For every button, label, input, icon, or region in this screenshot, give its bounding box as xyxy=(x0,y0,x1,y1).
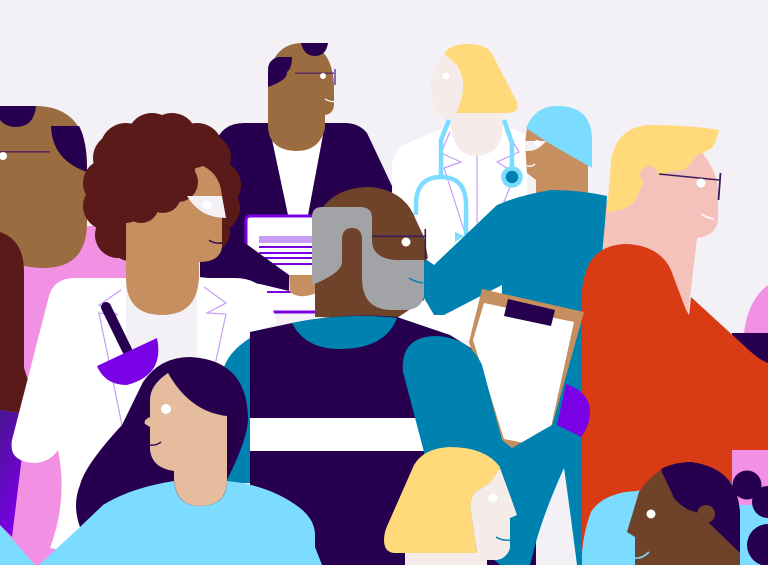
man in suit: hand xyxy=(289,275,316,296)
figure: left edge person in maroon and purple xyxy=(0,232,28,537)
man with grey hair: reflective stripe xyxy=(250,418,426,451)
woman with curly hair: front curls xyxy=(105,135,198,223)
man with grey hair: left teal sleeve xyxy=(223,338,250,483)
man with grey hair: head and neck xyxy=(315,187,428,318)
surgeon: head xyxy=(525,120,588,200)
man in suit: jacket xyxy=(200,123,392,300)
surgeon: smile xyxy=(527,164,535,166)
man in red: face and neck xyxy=(602,150,718,315)
surgeon: teal scrub arm xyxy=(424,190,607,440)
man with grey hair: purple glove xyxy=(557,384,590,437)
doctor: eye xyxy=(442,72,450,80)
surgeon: eye shield xyxy=(525,140,546,151)
man with grey hair: hair and beard xyxy=(312,207,424,310)
blonde woman bottom: eye and smile xyxy=(488,494,510,540)
woman with curly hair: back curls xyxy=(83,113,241,261)
man in suit: head xyxy=(268,43,334,151)
dark sliver xyxy=(530,542,536,565)
woman with curly hair: glasses xyxy=(187,196,226,218)
man in suit: hair xyxy=(268,43,328,87)
doctor: stethoscope xyxy=(416,120,520,242)
man with grey hair: teal collar xyxy=(292,316,397,349)
man in red: ear xyxy=(640,166,658,184)
figure: far left pink body xyxy=(0,226,135,565)
woman bottom right: pink background block xyxy=(732,450,768,510)
woman with curly hair: undershirt xyxy=(126,278,197,380)
tablet xyxy=(246,216,320,312)
man in red: smile xyxy=(701,214,714,219)
man with grey hair: glasses xyxy=(372,229,426,259)
doctor: neck and face xyxy=(430,50,503,156)
man in red: red sweater xyxy=(582,244,768,565)
doctor: white coat xyxy=(392,125,527,340)
dark-haired woman: face and neck xyxy=(145,373,227,506)
clipboard xyxy=(469,289,584,448)
man in suit: forearm over tablet xyxy=(200,215,289,291)
woman bottom right: dark hair buns xyxy=(732,470,768,565)
dark-haired woman: eye xyxy=(161,404,171,414)
man in suit: glasses and eye xyxy=(295,69,336,102)
surgeon: cap xyxy=(526,106,592,168)
bottom left blue shape xyxy=(0,525,35,565)
dark-haired woman: smile xyxy=(149,442,161,445)
man with grey hair: smile xyxy=(409,278,423,283)
purple pocket xyxy=(97,338,158,385)
figure: far left man head xyxy=(0,106,87,268)
doctor: blonde hair xyxy=(444,44,517,113)
pen in pocket xyxy=(106,307,127,350)
dark-haired woman: hair xyxy=(76,357,248,527)
woman with curly hair: white coat xyxy=(11,278,277,560)
doctor: lapel lines xyxy=(441,130,519,230)
lavender gap xyxy=(536,468,577,565)
woman with curly hair: face and neck xyxy=(126,166,222,315)
woman bottom right: eye and smile xyxy=(635,510,656,558)
man in red: glasses xyxy=(659,173,720,200)
woman bottom right: hair xyxy=(661,462,740,565)
woman bottom right: ear xyxy=(697,505,715,523)
man with grey hair: vest xyxy=(250,315,537,565)
man in red: hair xyxy=(607,125,719,212)
man in suit: white shirt xyxy=(271,135,323,215)
woman with curly hair: lapels xyxy=(99,287,226,425)
blonde woman bottom: face and neck xyxy=(405,468,517,565)
background figure: top right pink and dark xyxy=(732,285,768,383)
woman bottom right: blue shirt xyxy=(582,482,768,565)
woman bottom right: face xyxy=(627,470,740,565)
woman with curly hair: smile xyxy=(209,240,222,243)
dark-haired woman: blue shirt xyxy=(39,481,322,565)
man with grey hair: teal arm xyxy=(403,336,582,565)
blonde woman bottom: hair xyxy=(384,447,500,553)
